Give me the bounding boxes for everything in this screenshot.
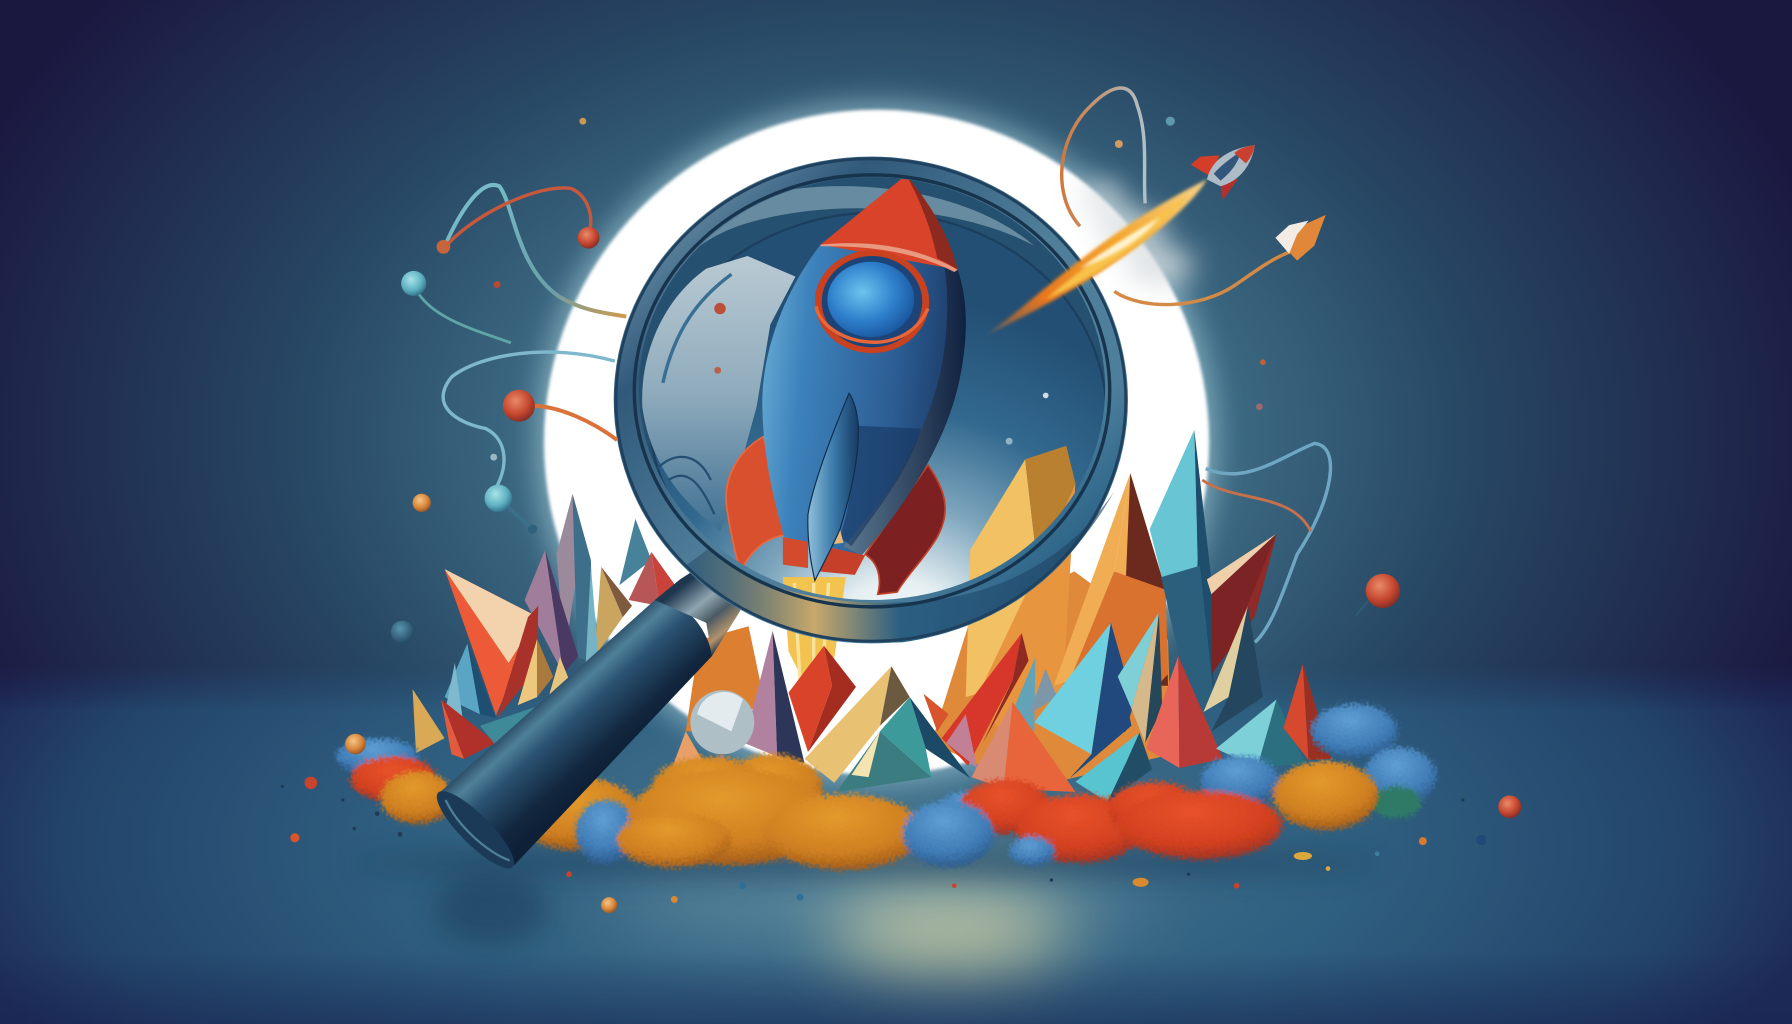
orbit wire xyxy=(1062,88,1145,226)
exhaust flame xyxy=(783,577,846,686)
glowing white circle xyxy=(536,102,1217,783)
blue peak xyxy=(445,643,496,720)
teal front peak xyxy=(837,697,970,792)
grey-blue peaks xyxy=(1011,657,1057,731)
gold block xyxy=(966,446,1075,731)
blue cyan peak xyxy=(1034,623,1134,778)
big orange peak xyxy=(1054,473,1168,731)
tall grey peak xyxy=(557,494,594,663)
rear fuzzy clouds xyxy=(336,704,1437,850)
tall teal peak xyxy=(1150,430,1214,709)
orange red peak xyxy=(445,569,538,718)
nozzles xyxy=(783,529,865,575)
porthole xyxy=(815,250,929,353)
rocket xyxy=(726,175,966,686)
front mountains xyxy=(413,606,1331,802)
orange ball wire xyxy=(531,406,617,440)
orange small peak xyxy=(923,694,949,731)
red wire xyxy=(443,188,591,249)
cyan front peak xyxy=(1216,699,1305,768)
floating balls xyxy=(345,117,1521,818)
mini rocket body xyxy=(1191,145,1255,200)
orange mass behind peaks xyxy=(931,571,1171,789)
back mountains xyxy=(445,430,1277,789)
shooting mini rocket xyxy=(986,145,1255,335)
left wires and balls xyxy=(417,185,626,528)
tan slim peak xyxy=(1203,606,1263,731)
rim xyxy=(614,157,1128,643)
nose cone xyxy=(821,175,958,272)
teal spike xyxy=(619,519,651,585)
red front peak xyxy=(789,646,856,752)
hull shading xyxy=(843,265,966,555)
right fin xyxy=(865,465,945,594)
kite and wire xyxy=(1114,215,1326,305)
ball wire xyxy=(417,291,511,343)
centre fin xyxy=(808,393,858,581)
red pink peak xyxy=(1146,656,1223,768)
smoke xyxy=(1080,184,1194,283)
lens glass xyxy=(637,175,1107,615)
teal wire xyxy=(443,185,626,317)
purple peak xyxy=(525,550,578,674)
orange wire xyxy=(1202,480,1311,531)
red centre peak xyxy=(942,633,1029,766)
pink small peak xyxy=(946,714,977,768)
orange front peak xyxy=(971,702,1075,792)
small left peaks xyxy=(413,689,537,759)
tan small peak xyxy=(669,731,737,777)
tan spike xyxy=(585,566,632,674)
collar xyxy=(655,567,741,656)
floor xyxy=(0,663,1792,1024)
blue wire xyxy=(1206,443,1330,642)
magnifying glass xyxy=(428,157,1128,877)
right wires xyxy=(1202,443,1330,642)
floor specks xyxy=(281,777,1486,913)
red right peak xyxy=(1283,664,1331,760)
dark red right peak xyxy=(1207,534,1277,674)
tan front peak xyxy=(805,666,910,783)
left fin xyxy=(726,437,786,571)
long blue wire xyxy=(443,352,615,491)
purple front peak xyxy=(744,631,805,763)
stick xyxy=(503,503,531,528)
handle xyxy=(428,599,712,877)
glass reflection xyxy=(642,256,795,531)
cyan tan peak xyxy=(1118,613,1162,743)
glass sphere xyxy=(690,690,754,754)
orange block behind handle xyxy=(686,626,763,731)
cyan low peak xyxy=(1075,733,1152,802)
flame trail xyxy=(986,179,1207,335)
tan peak xyxy=(518,639,553,705)
hull xyxy=(762,244,966,555)
pink peak xyxy=(629,552,686,606)
front fuzzy clouds xyxy=(576,754,1378,870)
